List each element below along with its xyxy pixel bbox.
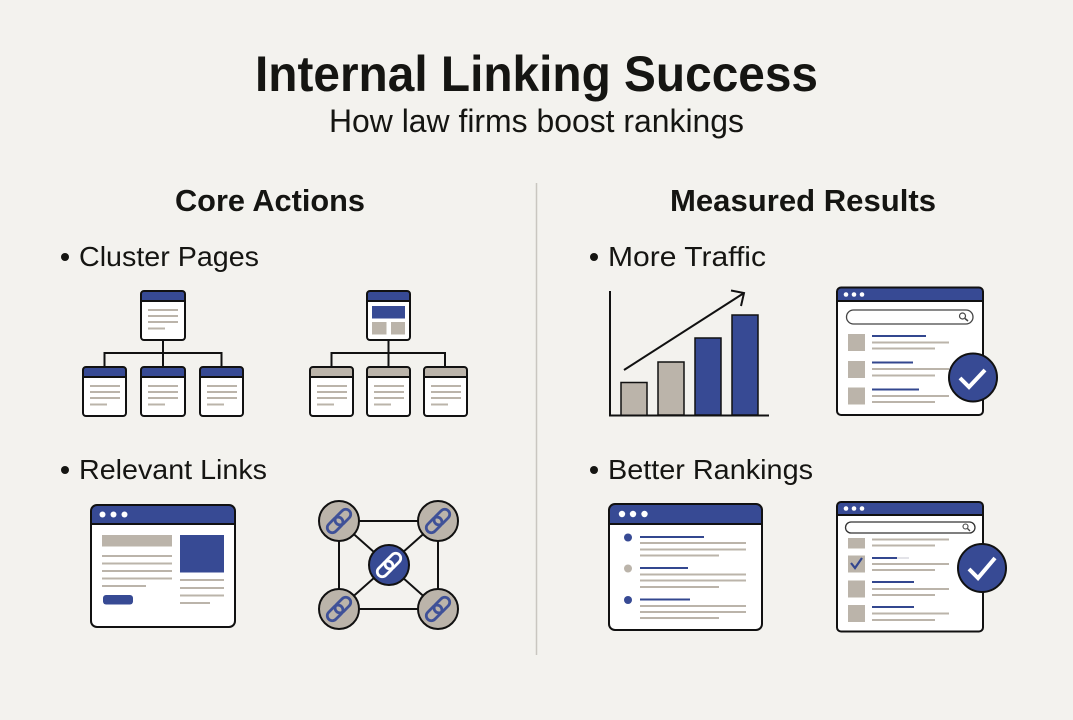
icon: link network: [319, 501, 458, 629]
bullet label: better rankings: Better Rankings: [608, 454, 813, 485]
bullet label: more traffic: More Traffic: [608, 241, 766, 272]
heading: core actions: Core Actions: [175, 183, 365, 218]
icon: search results with check: [837, 288, 997, 415]
arrow: upward trend: [624, 290, 744, 370]
icon: improved search results with check: [837, 502, 1006, 632]
subtitle: How law firms boost rankings: [329, 103, 744, 139]
title: Internal Linking Success: [255, 46, 818, 102]
bullet label: cluster pages: Cluster Pages: [79, 241, 259, 272]
icon: page cluster hierarchy, tan: [310, 291, 467, 416]
bar chart: rising traffic: [610, 290, 769, 416]
icon: web page with content: [91, 505, 235, 627]
bullet label: relevant links: Relevant Links: [79, 454, 267, 485]
divider: [536, 183, 538, 655]
icon: page cluster hierarchy, blue: [83, 291, 243, 416]
icon: ranked list page: [609, 504, 762, 630]
heading: measured results: Measured Results: [670, 183, 936, 218]
